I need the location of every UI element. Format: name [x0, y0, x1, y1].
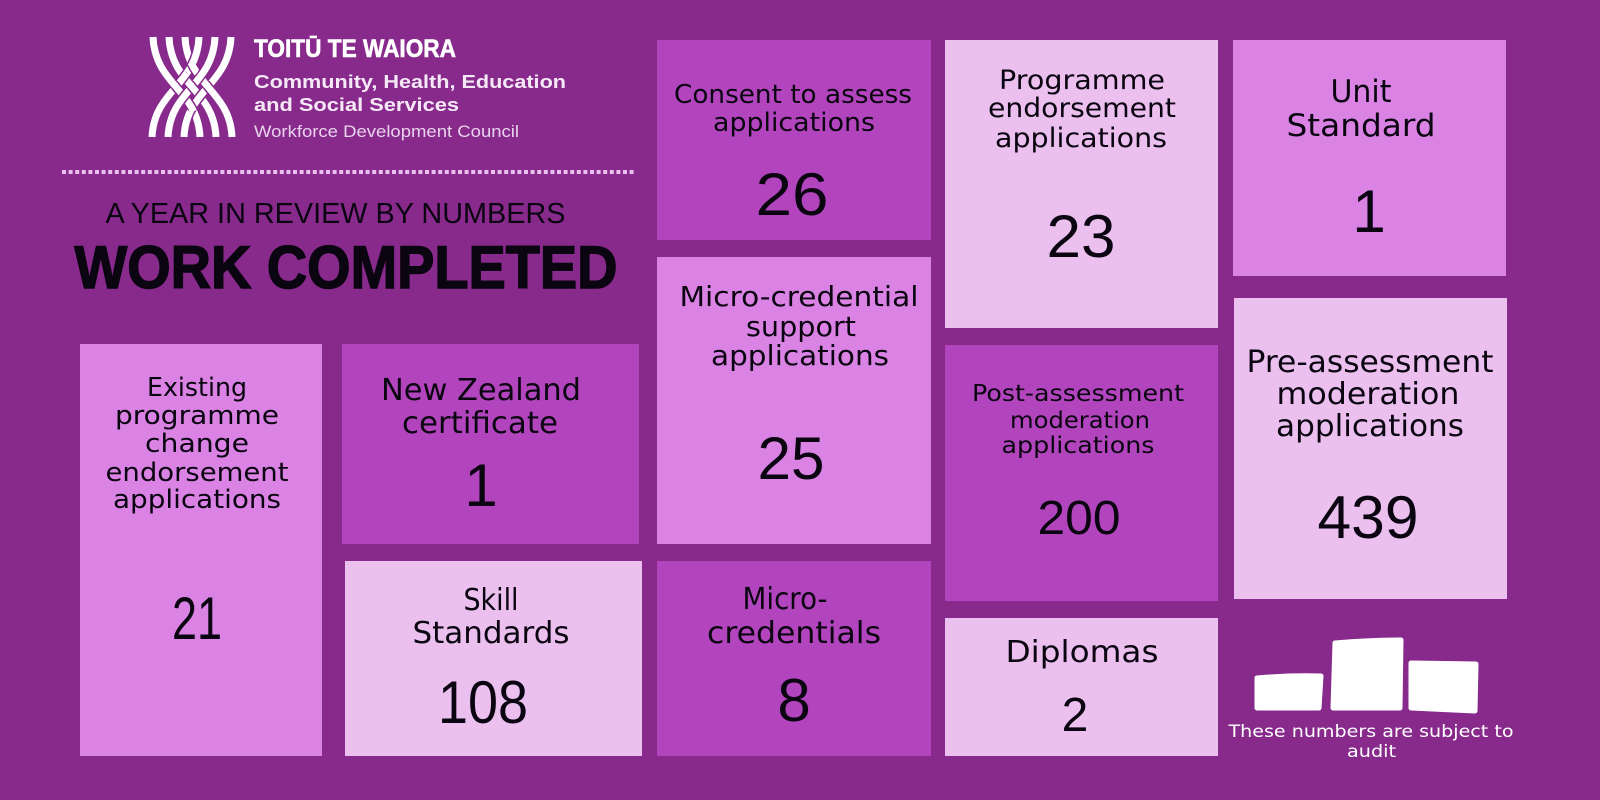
- panel: programme endorsement applications: [945, 40, 1218, 328]
- panel: skill standards: Skill: [464, 583, 518, 618]
- panel: micro-credential support applications: Micro-credential: [680, 280, 918, 313]
- note: audit disclaimer: audit: [1347, 742, 1396, 762]
- logo wordmark: Community, Health, Education: [254, 71, 566, 92]
- note: audit disclaimer: [1227, 722, 1514, 762]
- heading: subtitle: A YEAR IN REVIEW BY NUMBERS: [106, 198, 566, 230]
- panel: pre-assessment moderation applications: [1234, 298, 1507, 599]
- panel: diplomas: 2: [1062, 689, 1088, 742]
- panel: consent to assess applications: Consent to assess: [674, 80, 912, 110]
- panel: micro-credential support applications: [657, 257, 931, 544]
- panel: unit standard: [1233, 40, 1506, 276]
- logo wordmark: [254, 35, 566, 141]
- panel: unit standard: Standard: [1286, 108, 1436, 144]
- panel: pre-assessment moderation applications: 439: [1318, 484, 1418, 551]
- panel: pre-assessment moderation applications: moderation: [1276, 377, 1460, 412]
- panel: skill standards: [345, 561, 642, 756]
- panel: existing programme change endorsement applications: applications: [113, 485, 281, 515]
- panel: existing programme change endorsement applications: programme: [115, 401, 279, 431]
- panel: existing programme change endorsement applications: 21: [172, 585, 222, 652]
- panel: New Zealand certificate: 1: [464, 452, 498, 519]
- panel: post-assessment moderation applications: 200: [1038, 492, 1120, 545]
- panel: post-assessment moderation applications: applications: [1002, 433, 1154, 459]
- panel: programme endorsement applications: 23: [1046, 203, 1116, 270]
- panel: New Zealand certificate: [342, 344, 639, 544]
- icon: woven strands: [152, 37, 232, 137]
- panel: existing programme change endorsement applications: endorsement: [106, 458, 288, 488]
- panel: micro-credentials: [657, 561, 931, 756]
- logo wordmark: Workforce Development Council: [254, 123, 519, 141]
- panel: diplomas: Diplomas: [1006, 635, 1158, 670]
- panel: micro-credentials: Micro-: [742, 582, 828, 617]
- heading: title: WORK COMPLETED: [74, 234, 618, 301]
- panel: micro-credential support applications: applications: [711, 339, 889, 372]
- panel: post-assessment moderation applications: [945, 345, 1218, 601]
- logo wordmark: TOITŪ TE WAIORA: [254, 35, 456, 63]
- panel: pre-assessment moderation applications: Pre-assessment: [1246, 345, 1494, 380]
- icon: podium blocks: [1257, 640, 1476, 711]
- logo: Toitū Te Waiora: [152, 35, 566, 141]
- panel: existing programme change endorsement applications: change: [145, 429, 249, 459]
- panel: programme endorsement applications: endorsement: [988, 93, 1176, 124]
- panel: micro-credentials: credentials: [707, 616, 881, 651]
- panel: skill standards: Standards: [412, 616, 570, 651]
- panel: existing programme change endorsement applications: [80, 344, 322, 756]
- panel: micro-credentials: 8: [777, 667, 811, 734]
- panel: pre-assessment moderation applications: applications: [1276, 409, 1464, 444]
- panel: post-assessment moderation applications: moderation: [1010, 408, 1150, 434]
- panel: unit standard: 1: [1352, 178, 1386, 245]
- panel: New Zealand certificate: New Zealand: [381, 373, 581, 408]
- panel: consent to assess applications: 26: [756, 161, 828, 228]
- panel: existing programme change endorsement applications: Existing: [147, 373, 247, 403]
- note: audit disclaimer: These numbers are subject to: [1227, 722, 1514, 742]
- panel: micro-credential support applications: 25: [758, 425, 824, 492]
- panel: micro-credential support applications: support: [746, 310, 856, 343]
- logo wordmark: and Social Services: [254, 94, 459, 115]
- panel: programme endorsement applications: applications: [995, 123, 1167, 154]
- panel: unit standard: Unit: [1330, 74, 1392, 110]
- panel: post-assessment moderation applications: Post-assessment: [972, 381, 1184, 407]
- panel: programme endorsement applications: Programme: [999, 65, 1165, 96]
- panel: consent to assess applications: [657, 40, 931, 240]
- panel: skill standards: 108: [438, 669, 528, 736]
- panel: diplomas: [945, 618, 1218, 756]
- panel: consent to assess applications: applications: [713, 108, 875, 138]
- panel: New Zealand certificate: certificate: [402, 406, 558, 441]
